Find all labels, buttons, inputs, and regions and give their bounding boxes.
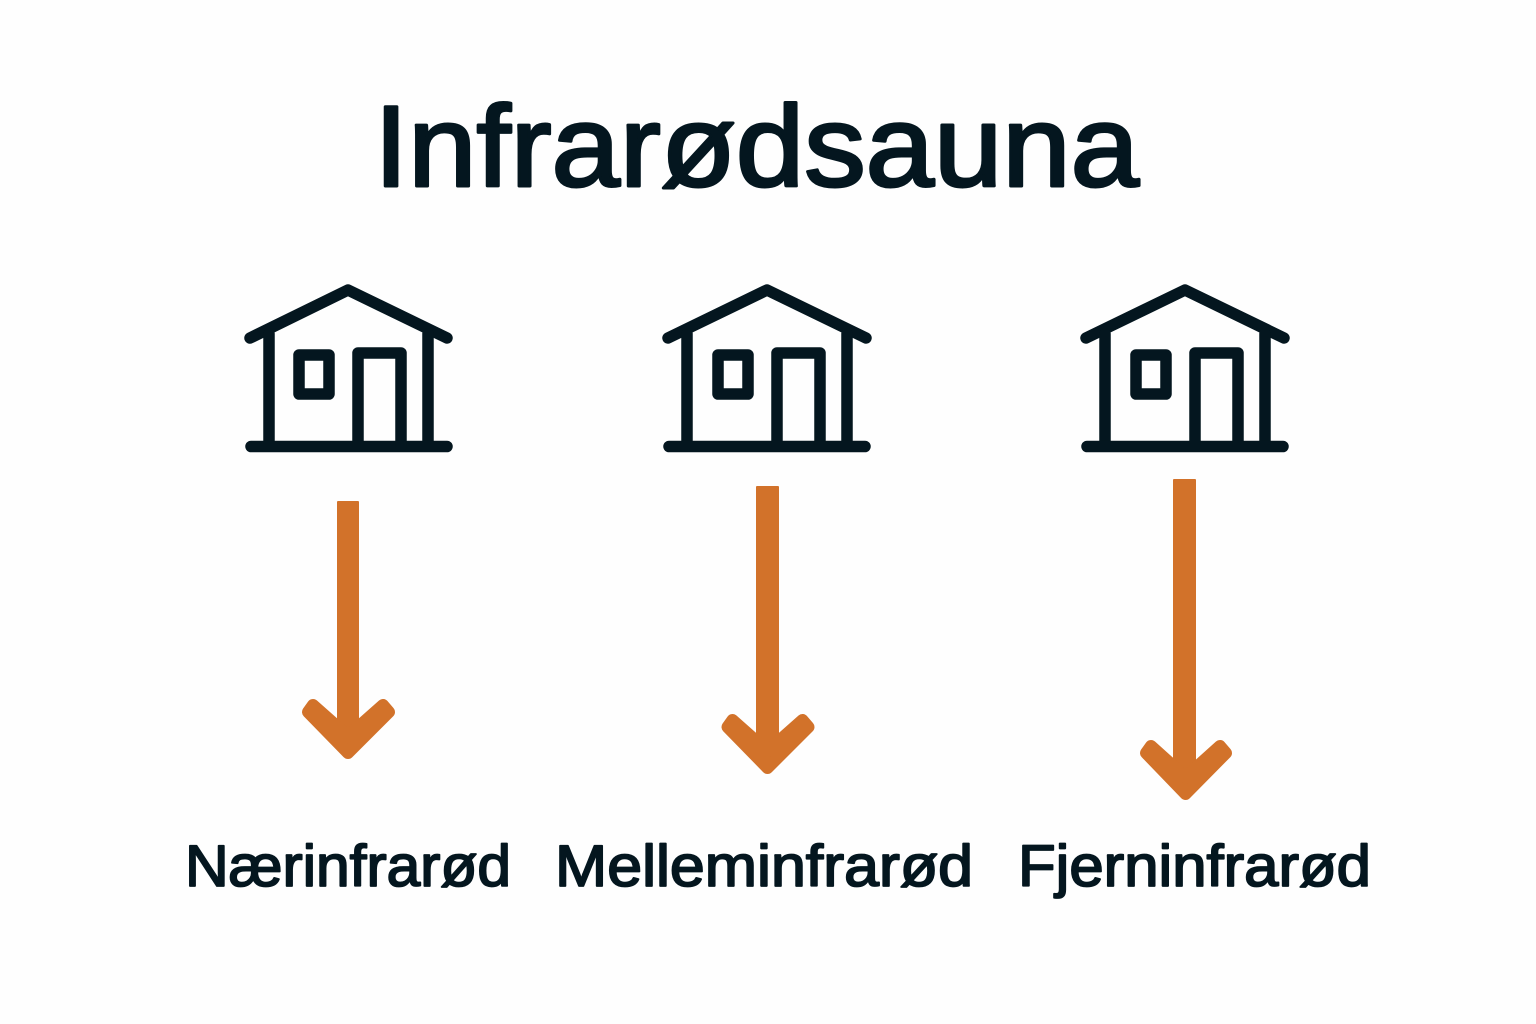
title: Infrarødsauna bbox=[374, 83, 1139, 211]
icon: house 3 bbox=[1086, 290, 1284, 446]
arrow 3 bbox=[1146, 479, 1226, 794]
icon: house 1 bbox=[250, 290, 447, 446]
label: Nærinfrarød: Nærinfrarød bbox=[185, 834, 511, 899]
arrow 1 bbox=[308, 501, 389, 753]
arrow 2 bbox=[728, 486, 808, 768]
label: Fjerninfrarød: Fjerninfrarød bbox=[1018, 834, 1371, 899]
icon: house 2 bbox=[668, 290, 866, 446]
label: Melleminfrarød: Melleminfrarød bbox=[555, 834, 973, 899]
